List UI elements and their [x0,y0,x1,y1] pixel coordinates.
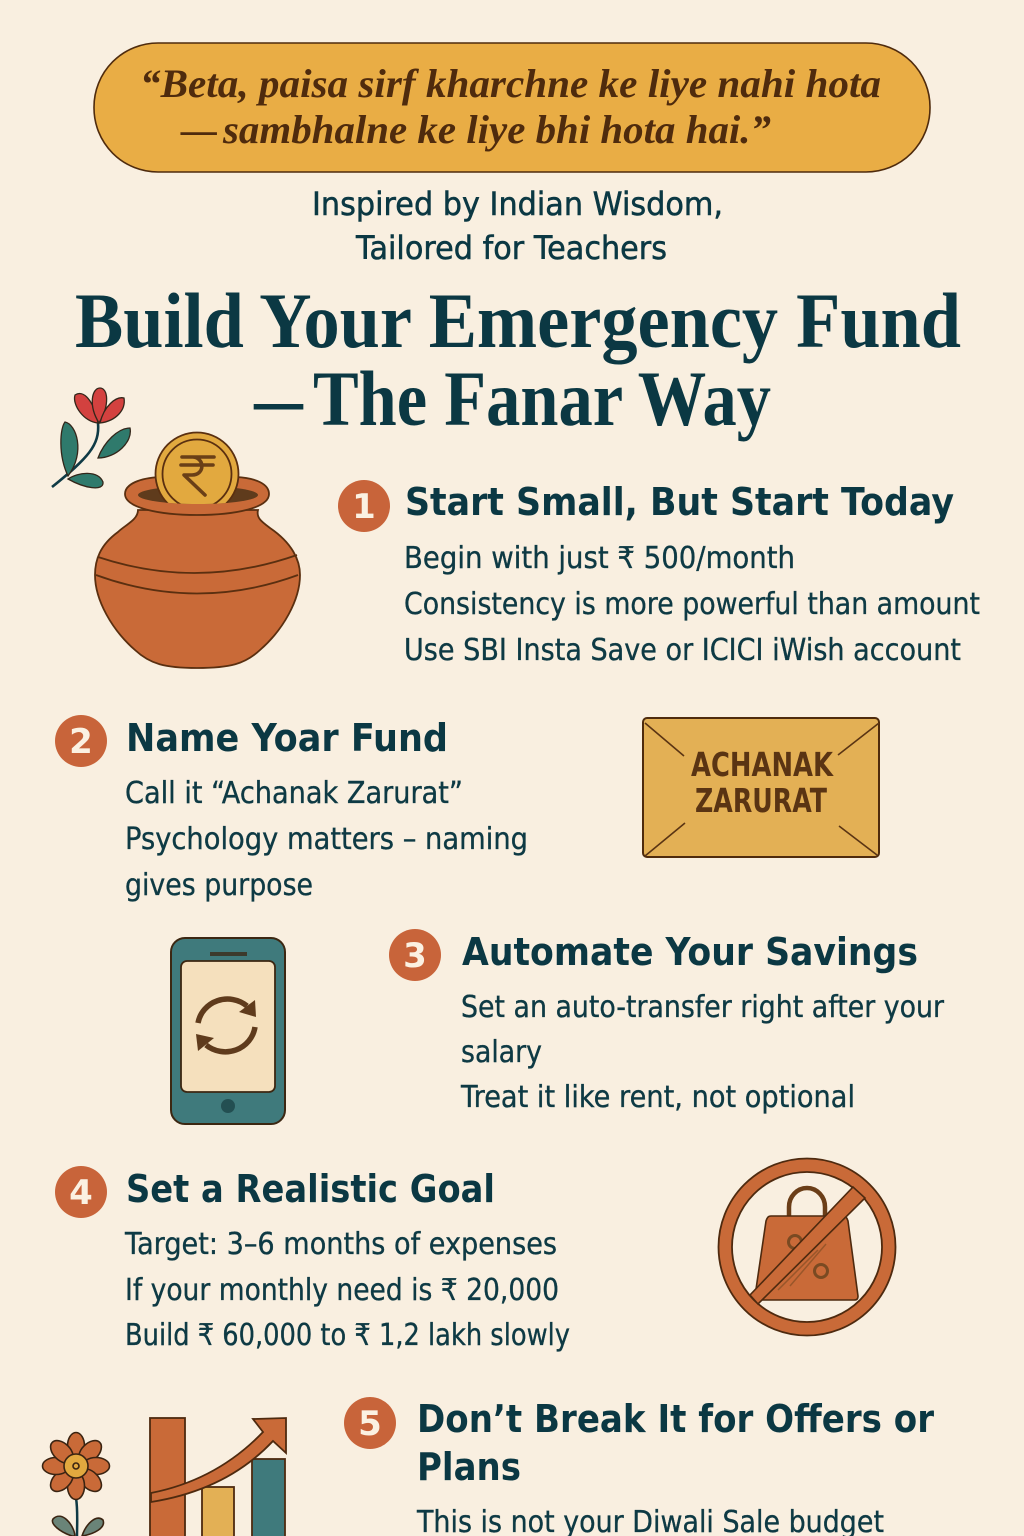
quote banner [94,43,930,172]
body 4: Build ₹ 60,000 to ₹ 1,2 lakh slowly [125,1318,570,1353]
body 1 [404,541,980,668]
number badge 4 [55,1166,107,1218]
body 2: Call it “Achanak Zarurat” [125,776,463,811]
icon: growth bar chart with arrow [150,1418,286,1536]
body 1: Begin with just ₹ 500/month [404,541,795,576]
body 4: Target: 3–6 months of expenses [124,1227,557,1262]
icon: orange flower [42,1432,110,1536]
body 3: Treat it like rent, not optional [460,1080,855,1115]
section 1: start small [338,480,980,668]
body 1: Use SBI Insta Save or ICICI iWish account [404,633,961,668]
heading 5 [417,1397,934,1489]
icon: clay pot with rupee coin [95,432,300,668]
icon: envelope: ZARURAT [695,781,827,820]
number badge 3: 3 [403,936,427,976]
body 2 [125,776,528,903]
number badge 2: 2 [69,722,93,762]
quote banner: — [180,107,217,152]
number badge 3 [389,929,441,981]
section 4: realistic goal [55,1166,570,1353]
icon: red flower sprig [52,388,130,488]
number badge 1: 1 [352,487,376,527]
section 5: don't break it [344,1397,934,1536]
icon: envelope: ACHANAK [691,745,834,784]
icon: phone with sync arrows [171,938,285,1124]
number badge 5: 5 [358,1404,382,1444]
number badge 4: 4 [69,1173,93,1213]
section 3: automate [389,929,945,1115]
title: Build Your Emergency Fund [75,277,961,364]
body 4: If your monthly need is ₹ 20,000 [125,1273,559,1308]
body 4 [124,1227,570,1353]
body 2: gives purpose [125,868,313,903]
body 3 [460,990,945,1115]
title [75,277,961,442]
quote banner: “Beta, paisa sirf kharchne ke liye nahi hota [140,61,881,106]
body 2: Psychology matters – naming [125,822,528,857]
heading 3: Automate Your Savings [462,930,918,974]
number badge 5 [344,1397,396,1449]
subtitle: Tailored for Teachers [355,229,667,267]
number badge 2 [55,715,107,767]
heading 1: Start Small, But Start Today [405,480,954,524]
body 3: salary [461,1035,542,1070]
heading 4: Set a Realistic Goal [126,1167,495,1211]
icon: no shopping bag [718,1158,896,1336]
body 3: Set an auto-transfer right after your [461,990,945,1025]
quote banner: sambhalne ke liye bhi hota hai.” [222,107,771,152]
subtitle [312,185,723,267]
title: — [253,355,304,442]
number badge 1 [338,480,390,532]
heading 5: Don’t Break It for Offers or [417,1397,934,1441]
heading 2: Name Yoar Fund [126,716,448,760]
icon: envelope [643,718,879,857]
title: The Fanar Way [313,355,771,442]
section 2: name your fund [55,715,528,903]
subtitle: Inspired by Indian Wisdom, [312,185,723,223]
heading 5: Plans [417,1445,521,1489]
